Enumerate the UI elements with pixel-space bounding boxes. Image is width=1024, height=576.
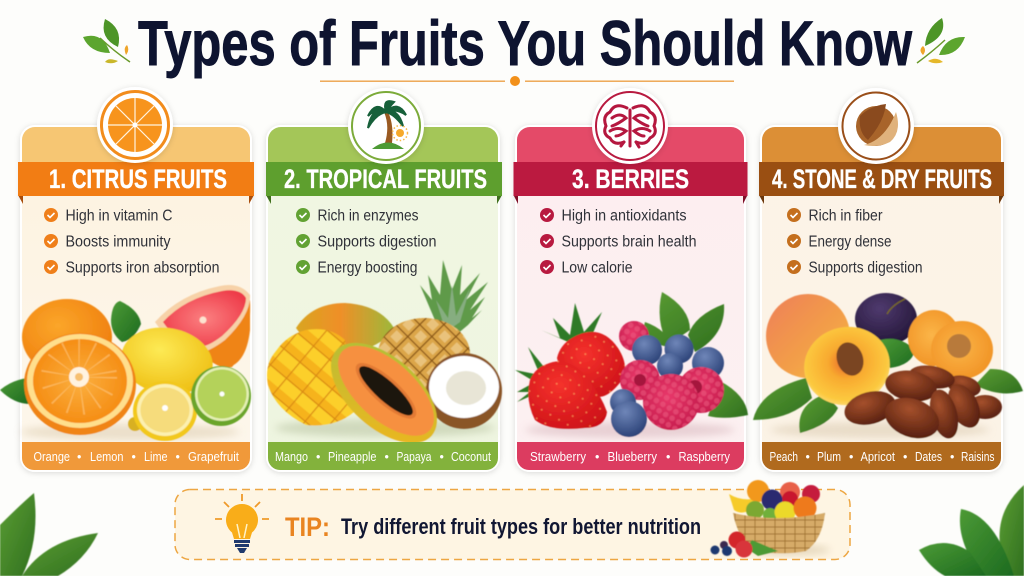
fruit name strip: • bbox=[440, 450, 444, 464]
bullet list: Supports digestion bbox=[318, 234, 436, 250]
fruit group: stone and dry bbox=[753, 293, 1023, 445]
decorative leaves: bottom right bbox=[919, 485, 1024, 576]
icon: orange slice bbox=[97, 87, 173, 163]
fruit group: tropical bbox=[267, 260, 502, 462]
panel: tip banner bbox=[175, 480, 850, 560]
fruit name strip: • bbox=[384, 450, 389, 464]
bullet list bbox=[44, 208, 220, 276]
fruit name strip: Grapefruit bbox=[188, 450, 239, 464]
card body bbox=[20, 125, 252, 472]
fruit name strip: • bbox=[316, 450, 320, 464]
fruit name strip bbox=[762, 442, 1001, 470]
bullet list bbox=[540, 208, 696, 276]
card top band bbox=[517, 127, 744, 165]
card top band bbox=[762, 127, 1001, 165]
bullet list: Energy dense bbox=[808, 234, 892, 250]
fruit name strip bbox=[517, 442, 744, 470]
icon: light bulb bbox=[215, 494, 269, 553]
fruit name strip: • bbox=[132, 450, 136, 464]
ribbon heading bbox=[514, 162, 748, 204]
bullet list: Supports iron absorption bbox=[66, 260, 220, 276]
bullet list bbox=[787, 208, 922, 276]
fruit name strip bbox=[22, 442, 250, 470]
panel: tropical fruits bbox=[266, 88, 502, 472]
bullet list: Supports digestion bbox=[808, 260, 922, 276]
icon: right title sprig bbox=[917, 18, 965, 63]
bullet list: Boosts immunity bbox=[66, 234, 171, 250]
ribbon heading bbox=[266, 162, 502, 204]
card top band bbox=[268, 127, 498, 165]
icon: left title sprig bbox=[83, 19, 130, 63]
fruit name strip: Lemon bbox=[90, 450, 124, 464]
card body bbox=[760, 125, 1003, 472]
ribbon heading bbox=[759, 162, 1004, 204]
card top band bbox=[22, 127, 250, 165]
ribbon heading: 2. TROPICAL FRUITS bbox=[284, 164, 487, 194]
fruit name strip: Orange bbox=[34, 450, 70, 464]
fruit name strip: Lime bbox=[144, 450, 168, 464]
icon: brain bbox=[592, 88, 668, 164]
bullet list bbox=[296, 208, 436, 276]
bullet list: Energy boosting bbox=[318, 260, 418, 276]
ribbon heading: 3. BERRIES bbox=[572, 164, 689, 194]
decorative leaves: bottom left bbox=[0, 493, 98, 576]
fruit name strip: Blueberry bbox=[608, 450, 658, 464]
tip text: Try different fruit types for better nutrition bbox=[341, 514, 701, 539]
fruit name strip: Pineapple bbox=[328, 450, 377, 464]
card body bbox=[515, 125, 746, 472]
fruit name strip: • bbox=[666, 450, 670, 464]
bullet list: High in antioxidants bbox=[562, 208, 687, 224]
bullet list: Low calorie bbox=[562, 260, 632, 276]
fruit name strip: Papaya bbox=[396, 450, 432, 464]
panel: citrus fruits bbox=[0, 87, 254, 472]
fruit name strip: • bbox=[950, 450, 954, 464]
bullet list: Rich in fiber bbox=[808, 208, 882, 224]
fruit name strip: • bbox=[849, 450, 853, 464]
tip box bbox=[175, 490, 850, 560]
fruit name strip: Raspberry bbox=[678, 450, 731, 464]
fruit name strip: Coconut bbox=[451, 450, 491, 464]
bullet list: High in vitamin C bbox=[66, 208, 172, 224]
icon: fruit basket bbox=[710, 480, 830, 558]
fruit name strip: • bbox=[176, 450, 180, 464]
fruit group: citrus bbox=[0, 285, 251, 441]
panel: berries bbox=[514, 88, 748, 472]
icon: nut bbox=[838, 88, 914, 164]
bullet list: Rich in enzymes bbox=[318, 208, 419, 224]
panel: stone and dry fruits bbox=[753, 88, 1023, 472]
fruit group: berries bbox=[515, 292, 748, 438]
bullet list: Supports brain health bbox=[562, 234, 696, 250]
fruit name strip: • bbox=[77, 450, 81, 464]
fruit name strip: Plum bbox=[817, 450, 841, 464]
fruit name strip: Strawberry bbox=[530, 450, 587, 464]
icon: palm tree bbox=[348, 88, 424, 164]
ribbon heading: 1. CITRUS FRUITS bbox=[49, 164, 227, 194]
fruit name strip: • bbox=[903, 450, 907, 464]
fruit name strip bbox=[268, 442, 498, 470]
fruit name strip: Mango bbox=[275, 450, 308, 464]
tip label: TIP: bbox=[285, 512, 330, 542]
fruit name strip: Apricot bbox=[860, 450, 895, 464]
fruit name strip: • bbox=[806, 450, 810, 464]
fruit name strip: Peach bbox=[770, 450, 798, 464]
title divider bbox=[320, 76, 734, 86]
fruit name strip: Raisins bbox=[961, 450, 994, 464]
fruit name strip: • bbox=[595, 450, 599, 464]
ribbon heading bbox=[18, 162, 254, 204]
card body bbox=[266, 125, 500, 472]
fruit name strip: Dates bbox=[915, 450, 942, 464]
